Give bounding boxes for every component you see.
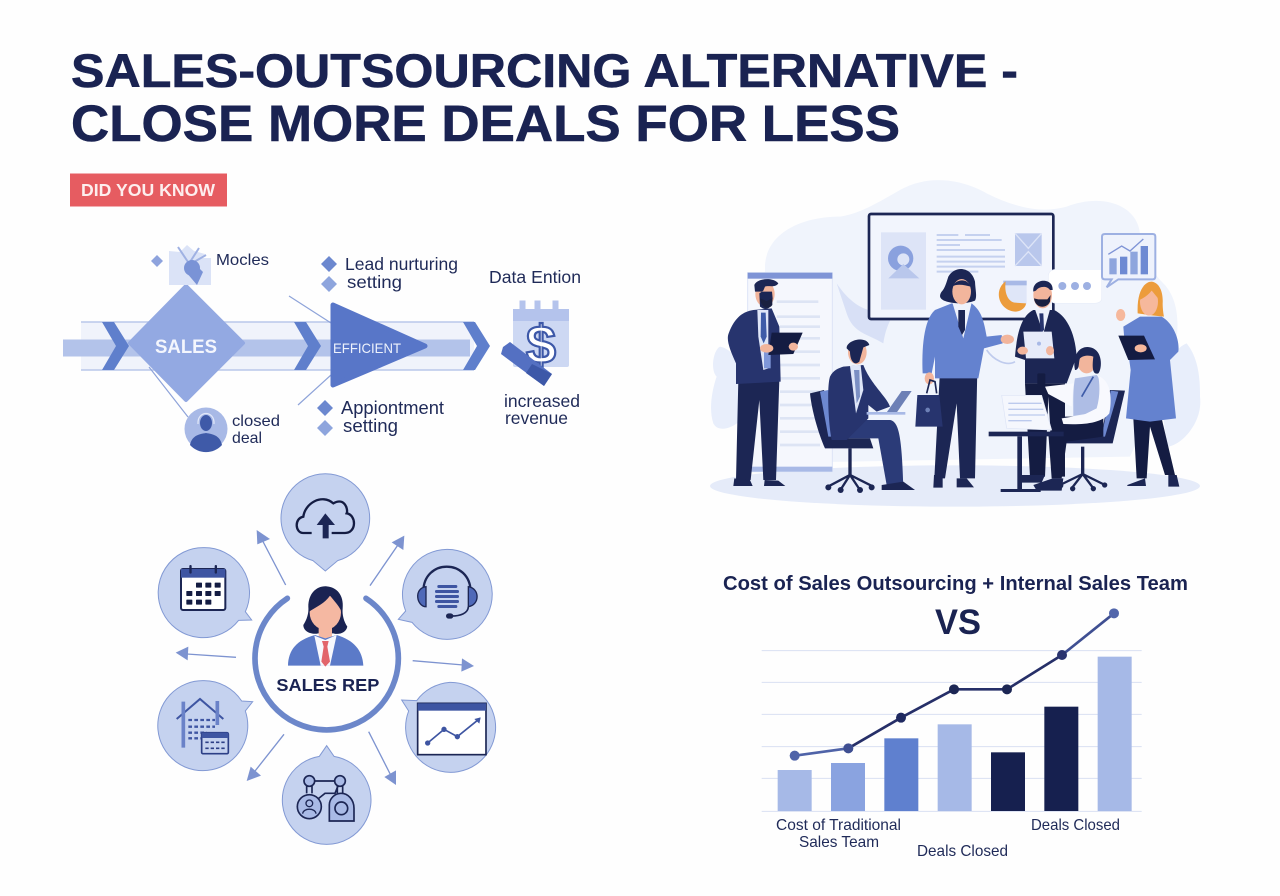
process flow diagram [63, 245, 581, 452]
ribbon swoosh [837, 283, 905, 343]
icon: dollar calendar and pen [501, 301, 569, 386]
bullets: lead nurturing: Lead nurturing [345, 254, 458, 274]
radial arrows [176, 530, 474, 785]
person: seated man with laptop [810, 339, 915, 493]
label: increased revenue: increased [504, 391, 580, 411]
node: calendar [158, 548, 252, 638]
chart axis labels: Deals Closed [917, 843, 1008, 860]
chart axis labels: Sales Team [799, 834, 879, 851]
ground ellipse [710, 465, 1200, 507]
person: standing woman presenter [915, 269, 1015, 488]
title: CLOSE MORE DEALS FOR LESS [71, 95, 900, 152]
icon: closed deal headset person [184, 408, 228, 452]
label: increased revenue: revenue [505, 408, 568, 428]
table with paper [989, 395, 1064, 492]
bullets: appointment setting [317, 398, 444, 436]
bullets: appointment setting: Appiontment [341, 398, 444, 418]
bars [778, 657, 1132, 811]
title: SALES-OUTSOURCING ALTERNATIVE - [71, 45, 1018, 98]
connector lines [149, 296, 331, 417]
node: network people [282, 746, 371, 844]
badge: did you know [70, 174, 227, 206]
node: line chart window [402, 682, 496, 772]
badge: did you know: DID YOU KNOW [81, 180, 215, 200]
node: headset [398, 549, 492, 639]
chart axis labels: Cost of Traditional [776, 817, 901, 834]
sales diamond: SALES [155, 337, 217, 358]
chart axis labels: Deals Closed [1031, 817, 1120, 834]
label: VS: VS [935, 603, 981, 642]
sales rep person icon [288, 586, 363, 667]
chart axis labels [776, 817, 1120, 860]
efficient triangle [333, 305, 425, 385]
chevron arrows [102, 322, 490, 370]
icon: models [151, 245, 211, 285]
chart bubble icon [1102, 234, 1155, 287]
left document board [748, 273, 832, 472]
efficient triangle: EFFICIENT [333, 340, 401, 356]
bullets: lead nurturing: setting [347, 272, 402, 292]
illustration: business team meeting [710, 180, 1200, 507]
label: closed deal: closed [232, 413, 280, 430]
label: increased revenue [504, 391, 580, 428]
label: data retention: Data Ention [489, 267, 581, 287]
title [71, 45, 1018, 152]
bullets: appointment setting: setting [343, 416, 398, 436]
icon: dollar calendar and pen: $ [526, 315, 556, 375]
label: closed deal [232, 413, 280, 447]
flow band [63, 322, 474, 370]
label: closed deal: deal [232, 430, 262, 447]
person: seated woman [1033, 347, 1125, 491]
hub diagram: sales rep [158, 474, 496, 844]
orange chart card [999, 281, 1027, 312]
grid lines [762, 651, 1142, 811]
node: building and calendar [158, 681, 253, 771]
background blobs [711, 180, 1200, 463]
person: standing man with tablet [728, 279, 803, 486]
trend line [790, 608, 1119, 761]
sales rep ring [255, 598, 398, 730]
label: sales rep: SALES REP [276, 675, 379, 695]
sales diamond [130, 286, 243, 400]
bullets: lead nurturing [321, 254, 458, 292]
person: standing man with document [1015, 281, 1077, 483]
chart title: Cost of Sales Outsourcing + Internal Sales Team [723, 572, 1188, 595]
label: models: Mocles [216, 252, 269, 269]
speech bubble with dots [1048, 269, 1102, 303]
node: cloud upload [281, 474, 370, 571]
presentation monitor [869, 214, 1053, 319]
person: standing woman in blue dress [1116, 282, 1179, 487]
combo chart: cost vs deals [762, 608, 1142, 811]
